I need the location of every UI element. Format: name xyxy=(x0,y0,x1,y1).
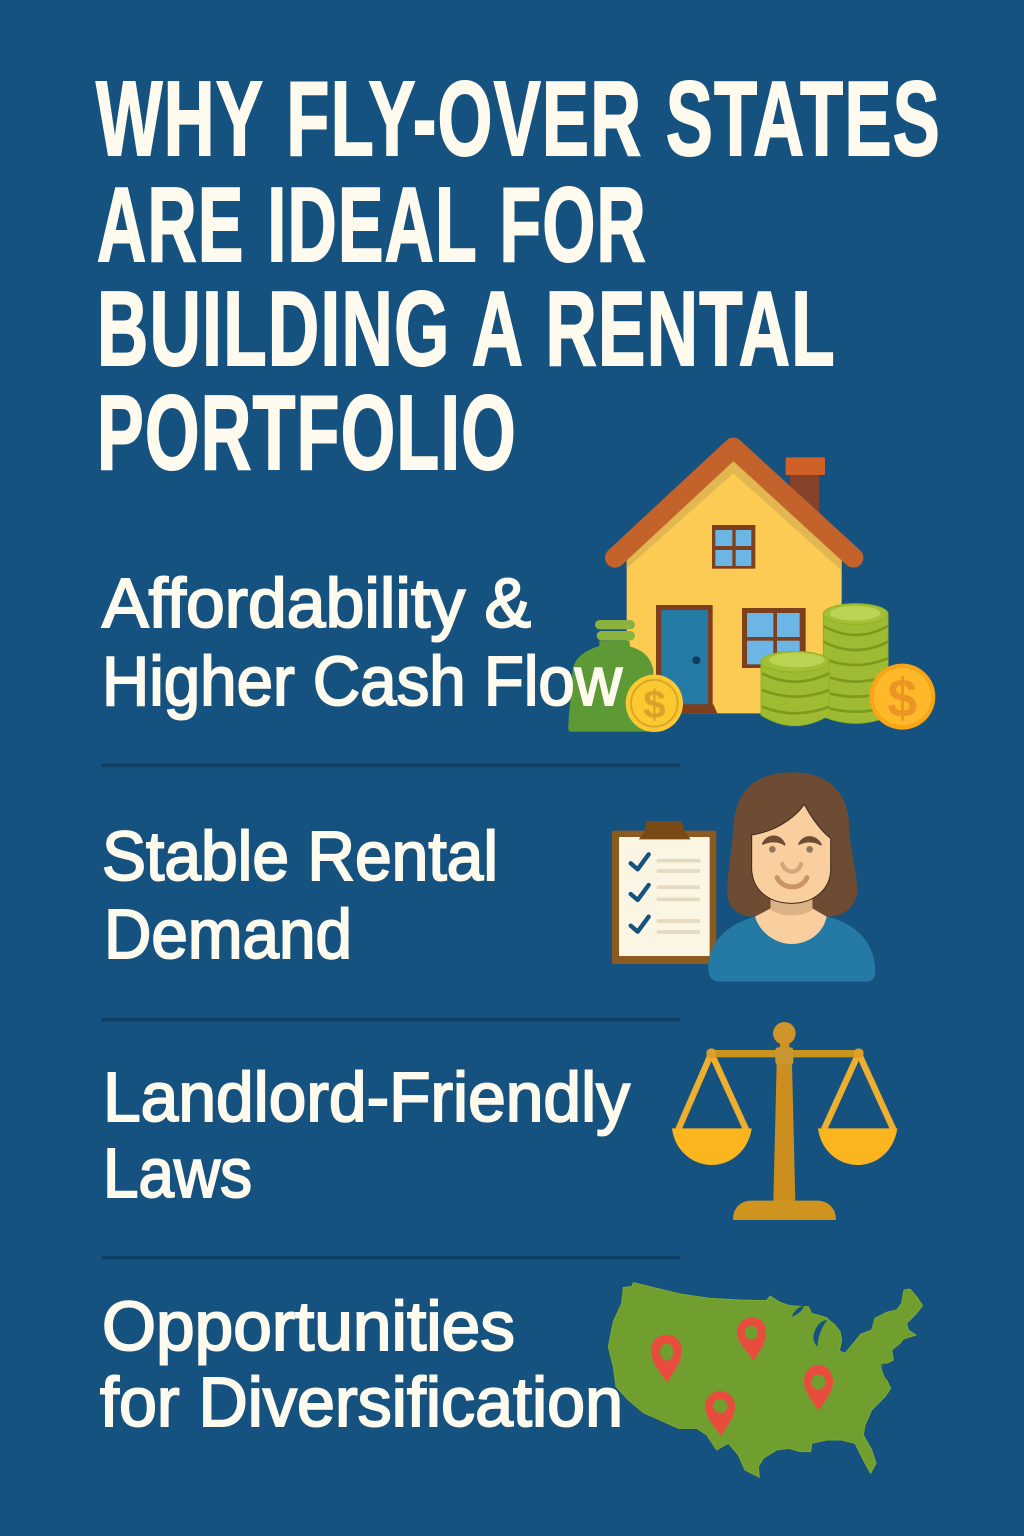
pin xyxy=(705,1391,735,1436)
heading: Stable Rental Demand xyxy=(102,817,498,973)
heading: Opportunities for Diversification: for Diversification xyxy=(100,1363,623,1441)
pin xyxy=(804,1365,833,1411)
heading: Opportunities for Diversification xyxy=(100,1287,623,1441)
money bag xyxy=(568,620,655,732)
short coin stack xyxy=(761,651,829,726)
title: PORTFOLIO xyxy=(97,374,517,492)
heading: Stable Rental Demand: Demand xyxy=(104,895,352,973)
person xyxy=(708,772,875,982)
gold coin on bag xyxy=(626,675,683,732)
heading: Affordability and Higher Cash Flow: Higher Cash Flow xyxy=(102,642,622,720)
lower window xyxy=(742,608,806,668)
chimney xyxy=(786,457,825,515)
pin xyxy=(651,1335,682,1383)
title xyxy=(96,60,941,492)
large gold coin xyxy=(869,664,935,730)
pin xyxy=(737,1317,766,1361)
heading: Landlord-Friendly Laws xyxy=(103,1058,630,1212)
tall coin stack xyxy=(823,604,888,723)
heading: Affordability and Higher Cash Flow: Affordability & xyxy=(102,564,531,642)
heading: Landlord-Friendly Laws: Landlord-Friendly xyxy=(103,1058,630,1136)
large gold coin: $ xyxy=(887,670,917,729)
heading: Affordability and Higher Cash Flow xyxy=(102,564,622,720)
icon: house with money bag and coin stacks xyxy=(568,448,935,732)
heading: Landlord-Friendly Laws: Laws xyxy=(103,1134,252,1212)
gold coin on bag: $ xyxy=(643,683,665,727)
door xyxy=(656,605,717,713)
title: ARE IDEAL FOR xyxy=(97,166,647,284)
icon: balance scales xyxy=(672,1022,897,1220)
icon: US map with location pins xyxy=(608,1283,923,1477)
upper window xyxy=(712,525,755,569)
heading: Opportunities for Diversification: Opportunities xyxy=(102,1287,515,1365)
clipboard xyxy=(612,821,716,964)
roof xyxy=(615,448,853,558)
heading: Stable Rental Demand: Stable Rental xyxy=(102,817,498,895)
great lakes and bay xyxy=(792,1306,887,1380)
icon: clipboard and tenant xyxy=(612,772,875,982)
house walls xyxy=(627,460,842,713)
